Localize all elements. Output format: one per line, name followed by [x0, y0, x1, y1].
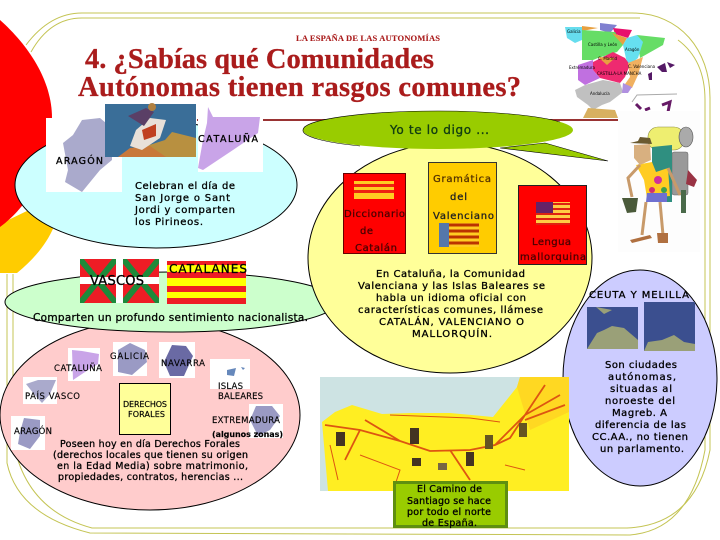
text: shared language: CATALÁN, VALENCIANO O — [379, 315, 524, 328]
map of Spain: Castilla y León — [588, 42, 618, 47]
labels: regions with Derechos Forales: CATALUÑA — [54, 363, 102, 374]
text: Derechos Forales description: propiedades, contratos, herencias ... — [58, 472, 243, 483]
labels: regions with Derechos Forales: PAÍS VASCO — [25, 390, 80, 402]
labels: regions with Derechos Forales: BALEARES — [218, 392, 263, 402]
title: 4. ¿Sabías qué Comunidades — [85, 44, 434, 75]
decoration: red circle — [0, 20, 52, 227]
book: Lengua mallorquina — [518, 186, 586, 264]
text: Derechos Forales description: Poseen hoy en día Derechos Forales — [60, 439, 240, 450]
text: shared language: En Cataluña, la Comunidad — [376, 269, 525, 280]
book: Diccionario de Catalán: Diccionario — [344, 209, 405, 220]
labels: regions with Derechos Forales — [14, 352, 283, 439]
labels: regions with Derechos Forales: ISLAS — [218, 382, 243, 392]
illustration: backpacker — [618, 111, 700, 252]
callout: Camino de Santiago: de España. — [422, 518, 477, 529]
heading: section label: LA ESPAÑA DE LAS AUTONOMÍAS — [296, 33, 440, 43]
heading: Ceuta y Melilla: CEUTA Y MELILLA — [589, 290, 689, 301]
image: St George — [105, 103, 196, 157]
image: Cataluña map: CATALUÑA — [198, 134, 258, 145]
book: Diccionario de Catalán: de — [360, 226, 373, 237]
decoration: yellow circle — [0, 195, 60, 273]
book: Diccionario de Catalán: Catalán — [355, 242, 397, 254]
callout: Camino de Santiago — [394, 482, 506, 529]
map of Spain: CASTILLA-LA MANCHA — [597, 71, 642, 76]
panel: blue Ceuta y Melilla oval — [563, 270, 717, 486]
flag: Catalan (CATALANES) — [167, 261, 247, 304]
speech bubble: Yo te lo digo ... — [389, 123, 489, 137]
text: nationalism: Comparten un profundo sentimiento nacionalista. — [33, 312, 308, 324]
text: Derechos Forales description — [53, 439, 248, 483]
box: Derechos Forales — [120, 384, 170, 434]
text: Ceuta y Melilla description: un parlamento. — [600, 444, 684, 455]
book: Gramática del Valenciano: del — [450, 192, 467, 203]
book: Gramática del Valenciano: Valenciano — [433, 211, 494, 222]
Derechos Forales regions — [11, 342, 283, 450]
text: shared language: habla un idioma oficial con — [376, 293, 526, 304]
panel: green nationalism oval — [5, 272, 337, 332]
text: shared language: Valenciana y las Islas Baleares se — [358, 281, 545, 292]
text: Ceuta y Melilla description: noroeste del — [605, 396, 675, 407]
map of Spain: Galicia — [567, 29, 581, 34]
text: Ceuta y Melilla description: CC.AA., no tienen — [592, 432, 688, 443]
panel: Pink Derechos Forales oval — [0, 320, 300, 510]
title — [78, 44, 521, 103]
text: Ceuta y Melilla description: autónomas, — [608, 371, 676, 383]
box: Derechos Forales: DERECHOS — [123, 400, 167, 409]
box: Derechos Forales: FORALES — [128, 410, 165, 419]
labels: regions with Derechos Forales: (algunos zonas) — [212, 430, 283, 439]
image: Melilla — [644, 302, 695, 351]
flag: Basque (VASCOS) — [80, 259, 159, 303]
text: San Jorge: Celebran el día de — [135, 180, 235, 192]
text: Ceuta y Melilla description: Magreb. A — [612, 408, 667, 419]
labels: regions with Derechos Forales: ARAGÓN — [14, 425, 52, 437]
text: Ceuta y Melilla description — [592, 360, 688, 455]
text: Derechos Forales description: (derechos locales que tienen su origen — [53, 450, 248, 461]
book: Gramática del Valenciano: Gramática — [433, 173, 491, 185]
book: Lengua mallorquina: Lengua — [532, 237, 571, 248]
speech bubble — [303, 111, 608, 161]
image: Ceuta — [587, 307, 638, 349]
map of Spain: Extremadura — [569, 65, 596, 70]
book: Diccionario de Catalán — [344, 174, 406, 254]
text: shared language — [358, 269, 545, 340]
panel: yellow language circle — [308, 143, 592, 373]
text: shared language: características comunes, llámese — [358, 304, 543, 316]
labels: regions with Derechos Forales: EXTREMADURA — [212, 416, 280, 426]
callout: Camino de Santiago: Santiago se hace — [407, 496, 491, 507]
map of Spain — [563, 22, 677, 119]
title: Autónomas tienen rasgos comunes? — [78, 72, 521, 103]
callout: Camino de Santiago: El Camino de — [417, 484, 482, 495]
image: Aragón map: ARAGÓN — [56, 155, 103, 167]
map: Camino de Santiago — [320, 377, 569, 491]
text: San Jorge: Jordi y comparten — [134, 205, 235, 216]
text: Derechos Forales description: en la Edad Media) sobre matrimonio, — [57, 461, 248, 472]
map of Spain: Aragón — [625, 47, 640, 52]
image: Cataluña map — [198, 107, 263, 172]
flag: Catalan (CATALANES): CATALANES — [169, 262, 247, 276]
rule under title — [197, 119, 622, 121]
text: San Jorge — [134, 180, 235, 228]
text: Ceuta y Melilla description: situadas al — [610, 384, 672, 395]
labels: regions with Derechos Forales: GALICIA — [110, 352, 149, 362]
book: Gramática del Valenciano — [428, 162, 496, 254]
labels: regions with Derechos Forales: NAVARRA — [161, 359, 205, 369]
book: Lengua mallorquina: mallorquina — [520, 252, 586, 263]
text: San Jorge: San Jorge o Sant — [135, 193, 230, 204]
image: Aragón map — [46, 118, 122, 192]
text: San Jorge: los Pirineos. — [135, 217, 203, 228]
map of Spain: C. Valenciana — [628, 64, 656, 69]
text: shared language: MALLORQUÍN. — [412, 327, 492, 340]
flag: Basque (VASCOS): VASCOS — [90, 274, 144, 289]
map of Spain: C. Madrid — [598, 56, 618, 61]
callout: Camino de Santiago: por todo el norte — [407, 507, 491, 518]
text: Ceuta y Melilla description: diferencia de las — [595, 420, 686, 431]
text: Ceuta y Melilla description: Son ciudades — [605, 360, 677, 371]
map of Spain: Andalucía — [590, 91, 610, 96]
panel: cyan San Jorge oval — [15, 122, 297, 248]
